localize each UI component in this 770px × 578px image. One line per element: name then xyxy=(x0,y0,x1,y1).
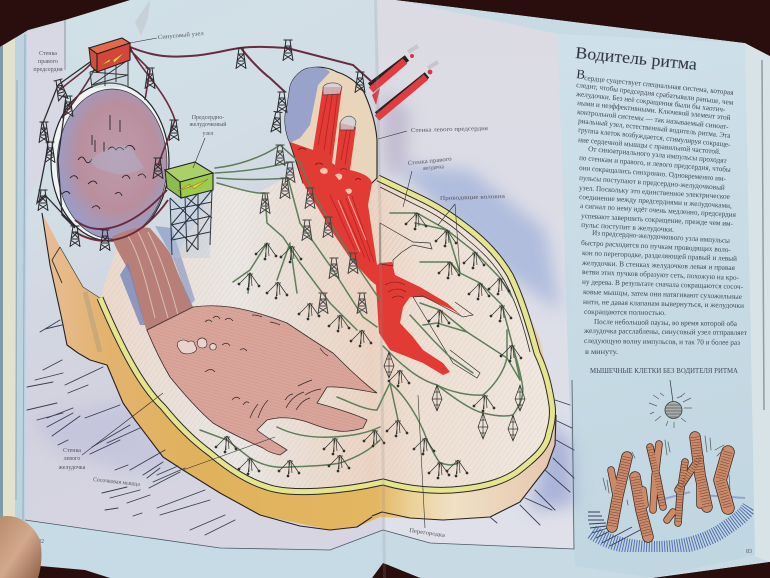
muscle cells illustration xyxy=(588,380,750,549)
icon: lightning av xyxy=(178,179,208,191)
body text: В xyxy=(576,66,586,82)
callout: sinus node: Синусовый узел xyxy=(158,30,204,41)
red blood xyxy=(290,83,463,375)
callout: left atrium wall xyxy=(378,126,488,139)
body text: контрольной системы — так называемый синоат- xyxy=(577,107,729,131)
callout: AV node: желудочковый xyxy=(189,121,227,128)
body text: соединение между предсердиями и желудочками, xyxy=(579,192,732,210)
body text: желудочки. В стенках желудочков левая и правая xyxy=(581,258,736,272)
sinus node box xyxy=(88,38,130,88)
burgundy conduction cables xyxy=(130,47,372,92)
right page illustration ground xyxy=(378,0,574,549)
callout: right ventricle wall: желудочка xyxy=(422,164,444,172)
atrial outflow to left ventricle xyxy=(112,227,200,332)
callout: left ventricle wall: левого xyxy=(64,456,80,462)
skin strokes left xyxy=(27,320,235,535)
callout: left ventricle wall xyxy=(58,393,163,471)
left margin band xyxy=(27,20,65,200)
av node box xyxy=(165,162,213,258)
conduction fibres green xyxy=(200,145,523,467)
fibre pylons xyxy=(215,145,525,479)
shadow hatching xyxy=(588,492,750,549)
right page edge stripes xyxy=(762,60,764,410)
body text: пульс поступит в желудочки. xyxy=(581,220,674,234)
callout: septum: Перегородка xyxy=(409,528,446,539)
page stack edge xyxy=(745,43,770,562)
heart illustration xyxy=(27,38,574,535)
body text: желудочка расслаблены, синусовый узел отправляет xyxy=(583,326,748,337)
body text: следующую волну импульсов, и так 70 и более раз xyxy=(584,336,740,347)
callout: left ventricle wall: желудочка xyxy=(58,465,86,471)
page number left: 82 xyxy=(38,539,44,545)
body text: сердце существует специальная система, которая xyxy=(584,73,735,97)
body text: ными и неэффективными. Ключевой элемент этой xyxy=(577,98,731,122)
body text: желудочки. Без неё сокращения были бы хаотич- xyxy=(575,89,726,114)
body text: быстро расходятся по пучкам проводящих воло- xyxy=(581,238,732,254)
callout: left atrium wall: Стенка левого предсердия xyxy=(411,126,488,134)
hand finger xyxy=(0,516,41,578)
atrium blood ripples xyxy=(62,115,146,209)
inner tissue xyxy=(100,165,553,492)
callout: AV node: узел xyxy=(202,131,214,137)
icon: lightning sinus xyxy=(100,52,125,66)
title: Водитель ритма xyxy=(575,43,698,74)
left ventricle cavity xyxy=(147,306,377,455)
callout: left ventricle wall: Стенка xyxy=(63,448,81,454)
left page illustration ground xyxy=(25,0,384,550)
disco ball xyxy=(649,380,692,428)
callout: conducting fibres xyxy=(438,194,505,273)
subheading: МЫШЕЧНЫЕ КЛЕТКИ БЕЗ ВОДИТЕЛЯ РИТМА xyxy=(590,366,739,375)
motion marks xyxy=(603,436,730,505)
body text: узел. Поскольку это единственное электрическое xyxy=(579,183,731,201)
body text: ние сердечной мышцы с правильной частотой. xyxy=(578,135,721,156)
skin strokes right xyxy=(490,400,574,525)
callout: sinus node xyxy=(130,30,204,43)
right page xyxy=(378,0,770,578)
callout: septum xyxy=(409,395,446,539)
body text: успевают завершить сокращение, прежде чем им- xyxy=(581,211,734,228)
body text: они сокращались синхронно. Одновременно им- xyxy=(579,163,727,183)
cell cylinders xyxy=(603,436,730,537)
page number right: 83 xyxy=(746,549,752,555)
body text: риальный узел, естественный водитель ритма. Эта xyxy=(578,116,732,140)
cell striations xyxy=(612,437,728,537)
callout: right atrium wall: правого xyxy=(38,59,58,65)
callout: papillary muscle: Сосочковая мышца xyxy=(93,477,140,488)
text column panel xyxy=(558,34,755,578)
book spine shadow xyxy=(374,0,386,578)
body text: ветви этих пучков образуют сеть, похожую на кро- xyxy=(582,267,740,282)
callout: papillary muscle xyxy=(93,437,275,488)
callout: right atrium wall: предсердия xyxy=(33,67,63,73)
body text: От синоатриального узла импульсы проходят xyxy=(588,144,728,165)
left page edge stack xyxy=(0,20,65,530)
body text: кон по перегородке, разделяющей правый и левый xyxy=(582,248,737,263)
body text xyxy=(575,66,748,356)
callout: AV node xyxy=(189,115,227,168)
body text: нити, не давая клапанам вывернуться, и желудочки xyxy=(583,297,744,310)
body text: пульсы поступают в предсердно-желудочковый xyxy=(579,173,725,192)
body text: в минуту. xyxy=(585,347,618,356)
outer fat shell xyxy=(42,178,556,530)
body text: следит, чтобы предсердия срабатывали раньше, чем xyxy=(576,80,734,107)
callout: conducting fibres: Проводящие волокна xyxy=(440,194,505,202)
body text: ну дерева. В результате сначала сокращаются сосоч- xyxy=(582,277,744,291)
blue shading xyxy=(30,90,575,510)
yellow wall band xyxy=(100,178,553,492)
callout: right ventricle wall xyxy=(403,156,452,207)
left atrium xyxy=(285,67,377,185)
right ventricle inner cavity outlines xyxy=(380,223,480,378)
body text: группа клеток возбуждается, стимулируя сокраще- xyxy=(578,125,731,149)
top grey smudge xyxy=(135,0,150,36)
ventricle blood splash xyxy=(177,338,216,354)
body text: ковые мышцы, затем они натягивают сухожильные xyxy=(583,287,743,301)
callout: right ventricle wall: Стенка правого xyxy=(408,156,452,167)
callout: AV node: Предсердно- xyxy=(192,115,224,121)
callout: right atrium wall xyxy=(33,51,63,73)
page lower rules xyxy=(25,380,574,550)
atrial tower web around right atrium xyxy=(37,47,175,283)
blood streaks xyxy=(318,90,374,262)
body text: После небольшой паузы, во время которой оба xyxy=(594,317,738,328)
body text: сокращаются полностью. xyxy=(584,307,666,317)
body text: Из предсердно-желудочкового узла импульсы xyxy=(592,228,730,245)
left page xyxy=(0,0,385,578)
callout: right atrium wall: Стенка xyxy=(39,51,57,57)
right atrium xyxy=(51,83,169,241)
blood vessels exiting xyxy=(370,46,438,118)
body text: по стенкам и правого, и левого предсердия, чтобы xyxy=(579,153,731,174)
body text: а сигнал по нему идёт очень медленно, предсердия xyxy=(580,201,737,219)
